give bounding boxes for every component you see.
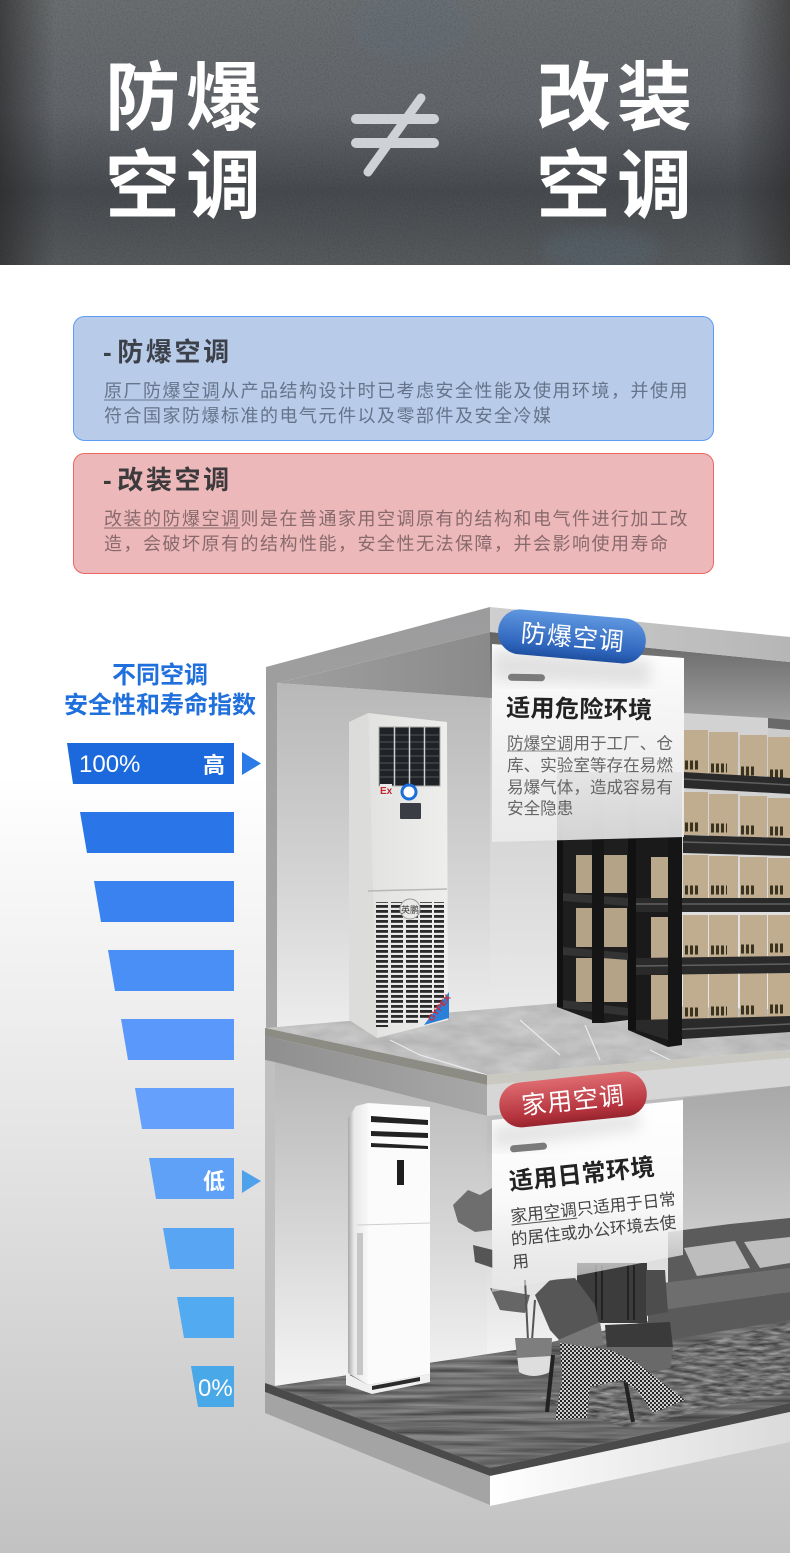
slats (371, 1116, 428, 1149)
tag: 防爆空调: 防爆空调 (520, 620, 626, 656)
headline: 防爆空调: 空调 (105, 144, 267, 228)
body text: 改装的防爆空调则是在普通家用空调原有的结构和电气件进行加工改 (104, 509, 689, 529)
top grille (379, 727, 440, 786)
base (346, 1373, 430, 1394)
right shelf unit (628, 730, 790, 1047)
blue logo (402, 785, 416, 799)
header banner (0, 0, 790, 272)
rug (540, 1322, 790, 1428)
body: 防爆空调用于工厂、仓 (507, 734, 673, 753)
index title: 安全性和寿命指数 (64, 691, 256, 719)
sofa (577, 1218, 790, 1340)
headline: 改装空调: 改装 (536, 56, 698, 140)
side vent (357, 1233, 363, 1375)
display (397, 1160, 404, 1185)
headline: 改装空调: 空调 (536, 144, 698, 228)
headline: 防爆空调: 防爆 (105, 56, 267, 140)
heading: -改装空调 (103, 465, 232, 495)
body: 的居住或办公环境去使 (510, 1213, 677, 1249)
not-equal symbol (356, 98, 434, 172)
potted plant (453, 1188, 552, 1376)
round emblem (400, 899, 420, 919)
bar labels: 0% (198, 1375, 233, 1402)
callout: 危险环境 (492, 608, 684, 842)
lower floor and slab (265, 1290, 790, 1506)
air conditioner: household (346, 1103, 430, 1394)
body text (104, 509, 689, 554)
body: 家用空调只适用于日常 (510, 1190, 677, 1226)
lower vents (376, 902, 444, 1027)
callout: 日常环境 (492, 1069, 683, 1292)
upper floor slab (265, 1003, 790, 1122)
panel: 防爆空调 description (74, 316, 714, 440)
armchair (535, 1278, 673, 1422)
tag: 防爆空调 (496, 608, 648, 665)
tag: 家用空调: 家用空调 (520, 1082, 626, 1120)
headline: 防爆空调 (110, 60, 260, 219)
upper room shell (266, 607, 790, 1050)
heading: 适用危险环境 (506, 695, 653, 725)
bar labels: 低 (203, 1169, 225, 1194)
control panel (400, 803, 421, 819)
body text (104, 381, 689, 426)
panel: 改装空调 description (74, 454, 714, 574)
heading: -防爆空调 (103, 337, 232, 367)
low marker arrow (242, 1170, 261, 1193)
body text: 原厂防爆空调从产品结构设计时已考虑安全性能及使用环境，并使用 (104, 381, 689, 401)
GYPEX corner tag: GYPEX (426, 993, 453, 1023)
air conditioner: explosion-proof (349, 713, 453, 1038)
body text: 造，会破坏原有的结构性能，安全性无法保障，并会影响使用寿命 (104, 534, 670, 554)
dash (508, 674, 545, 681)
body: 用 (511, 1251, 530, 1272)
body (507, 734, 673, 818)
headline: 改装空调 (539, 60, 690, 219)
body: 库、实验室等存在易燃 (507, 756, 673, 775)
lower room shell (265, 1060, 790, 1392)
body: 易爆气体，造成容易有 (507, 778, 673, 797)
heading: 适用日常环境 (508, 1154, 656, 1196)
body (507, 1190, 681, 1272)
bar labels (79, 751, 233, 1402)
bar labels: 高 (203, 753, 225, 778)
safety index bars (67, 743, 261, 1407)
high marker arrow (242, 752, 261, 775)
bar labels: 100% (79, 751, 140, 778)
Ex badge: Ex (380, 786, 393, 797)
index title: 不同空调 (112, 662, 208, 689)
body: 安全隐患 (507, 799, 573, 818)
round emblem: 英鹏 (401, 904, 419, 915)
dash (510, 1142, 547, 1153)
checked blanket (555, 1343, 685, 1420)
tag: 家用空调 (497, 1069, 649, 1130)
warehouse shelves with boxes (557, 730, 790, 1047)
index title (64, 662, 256, 719)
left shelf unit (557, 772, 628, 1023)
body text: 符合国家防爆标准的电气元件以及零部件及安全冷媒 (104, 406, 552, 426)
building cutaway (265, 607, 790, 1506)
